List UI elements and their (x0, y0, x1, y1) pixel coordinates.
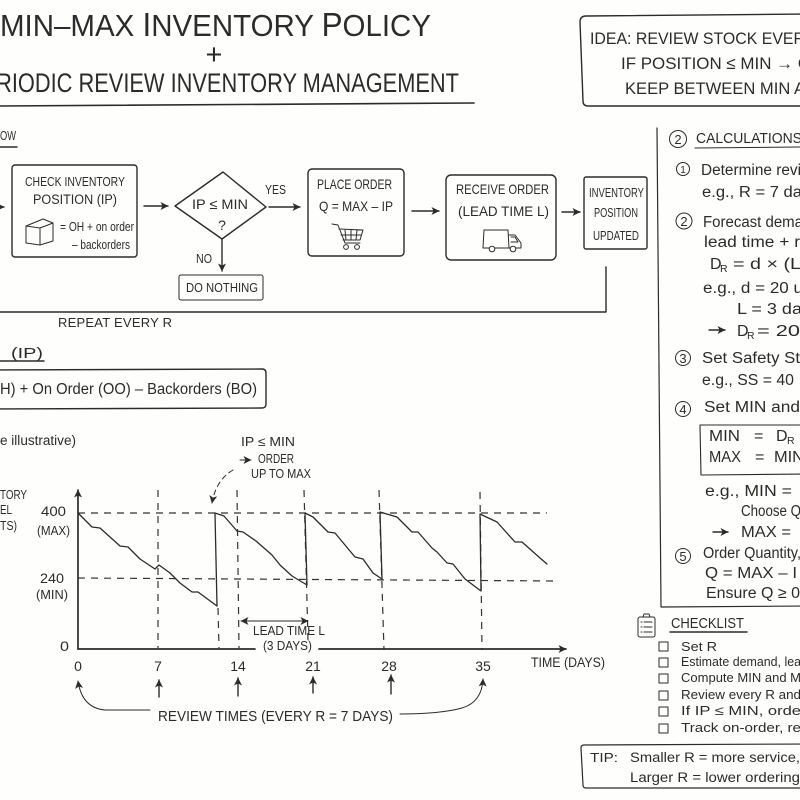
checklist items: Compute MIN and M (681, 670, 800, 685)
decision: IP at or below MIN (175, 172, 266, 239)
heading: checklist: CHECKLIST (671, 616, 744, 632)
box: receive order (446, 175, 556, 260)
formula box: min max: R (787, 435, 795, 447)
callout: tip: TIP: (590, 750, 618, 765)
box: place order (308, 169, 404, 256)
step 4: min and max: Set MIN and (704, 399, 800, 416)
step 4: min and max: MAX = (741, 524, 791, 541)
heading: workflow: OW (0, 128, 17, 143)
axis labels (0, 488, 605, 670)
x-axis tick labels: 35 (475, 658, 491, 674)
step 2: forecast demand: L = 3 da (737, 301, 800, 318)
x-axis tick labels: 7 (154, 658, 162, 674)
formula box: min max: D (776, 428, 788, 445)
step 2: forecast demand: R (720, 263, 728, 275)
decision: IP at or below MIN: IP ≤ MIN (192, 196, 248, 212)
callout: tip: Larger R = lower ordering (630, 770, 800, 785)
label: no: NO (196, 251, 212, 266)
axis labels: 0 (60, 638, 69, 654)
axis labels: (MAX) (37, 523, 70, 538)
x-axis tick labels: 21 (305, 658, 321, 674)
step 2: forecast demand: R (747, 330, 755, 342)
panel: calculations (657, 128, 800, 607)
step 5: order quantity (676, 545, 800, 602)
box: check inventory position: POSITION (IP) (33, 192, 117, 207)
box: check inventory position: – backorders (72, 237, 130, 252)
axes (78, 490, 566, 649)
box: inventory position updated: INVENTORY (589, 185, 644, 200)
checklist items: Set R (681, 639, 717, 654)
step 3: safety stock (676, 350, 800, 389)
lead time bracket (241, 621, 325, 653)
heading: workflow (0, 128, 17, 147)
step 4: min and max: e.g., MIN = (705, 483, 792, 500)
step 1: review period: e.g., R = 7 da (702, 184, 800, 201)
box: check inventory position: CHECK INVENTORY (25, 174, 125, 189)
checklist items: Review every R and (681, 687, 800, 702)
decision: IP at or below MIN: ? (218, 217, 226, 233)
axis labels: 400 (41, 503, 66, 519)
step 1: review period: 1 (680, 165, 686, 176)
callout: tip (581, 744, 800, 788)
box: place order: Q = MAX – IP (319, 198, 393, 214)
box: do nothing: DO NOTHING (186, 280, 258, 295)
box: receive order: RECEIVE ORDER (456, 181, 549, 197)
box: place order: PLACE ORDER (317, 176, 392, 192)
box: receive order: (LEAD TIME L) (458, 203, 549, 219)
step 3: safety stock: e.g., SS = 40 (702, 372, 794, 389)
formula box: inventory position (0, 369, 266, 409)
step 2: forecast demand: D (710, 256, 722, 273)
step 2: forecast demand: e.g., d = 20 u (703, 280, 800, 297)
review time arrows (78, 675, 483, 725)
step 2: forecast demand (676, 213, 800, 342)
box: inventory position updated: UPDATED (593, 228, 639, 243)
axis labels: TIME (DAYS) (531, 654, 605, 670)
axis labels: TS) (0, 519, 17, 533)
formula box: min max: MIN (709, 428, 740, 445)
x-axis tick labels: 14 (230, 658, 246, 674)
box: check inventory position (12, 165, 137, 257)
arrow: repeat loop (0, 267, 606, 312)
x-axis tick labels: 28 (381, 658, 397, 674)
lead time bracket: (3 DAYS) (263, 639, 312, 653)
review time arrows: REVIEW TIMES (EVERY R = 7 DAYS) (158, 708, 393, 725)
arrow: receive to updated (562, 211, 580, 213)
arrow: no (221, 239, 223, 271)
title: MIN–MAX INVENTORY POLICY (0, 6, 431, 43)
formula box: min max (700, 425, 800, 475)
step 3: safety stock: 3 (679, 351, 687, 366)
flowchart (0, 165, 647, 330)
note: illustrative: e illustrative) (0, 433, 76, 448)
checklist (638, 614, 800, 735)
inventory level line (78, 512, 547, 606)
checklist items: Track on-order, re (681, 720, 800, 735)
step 5: order quantity: Ensure Q ≥ 0 (706, 585, 800, 602)
formula box: min max: MAX (709, 449, 741, 466)
lead time bracket: LEAD TIME L (253, 624, 325, 638)
title (0, 6, 474, 106)
heading: inventory position (0, 345, 44, 362)
heading: calculations: 2 (674, 132, 682, 147)
box: inventory position updated (584, 177, 647, 249)
formula box: min max: = (754, 428, 763, 445)
x-axis tick labels (74, 658, 491, 674)
callout: core idea (580, 14, 800, 106)
step 5: order quantity: Q = MAX – I (705, 565, 797, 582)
icon: cube (26, 219, 53, 245)
arrow: into check inventory (0, 206, 4, 208)
step 5: order quantity: 5 (679, 549, 687, 564)
formula box: inventory position: H) + On Order (OO) – Backorders (BO) (0, 381, 257, 398)
arrow: order to receive (412, 210, 439, 212)
callout: tip: Smaller R = more service, (630, 750, 800, 765)
step 2: forecast demand: = d × (L (733, 256, 800, 273)
step 3: safety stock: Set Safety St (702, 350, 800, 367)
step 4: min and max: 4 (679, 402, 687, 417)
dashed reference lines (78, 490, 557, 650)
icon: truck (483, 230, 521, 248)
formula box: min max: = (755, 449, 764, 466)
axis labels: EL (0, 503, 12, 517)
callout: order up to max: IP ≤ MIN (241, 434, 295, 449)
x-axis tick labels: 0 (74, 658, 82, 674)
step 4: min and max (676, 399, 800, 541)
callout: order up to max: UP TO MAX (251, 466, 311, 481)
box: inventory position updated: POSITION (594, 205, 638, 220)
axis labels: (MIN) (36, 587, 68, 602)
step 1: review period: Determine revi (701, 162, 800, 179)
step 2: forecast demand: 2 (680, 214, 688, 229)
step 2: forecast demand: lead time + r (704, 234, 800, 251)
heading: inventory position: (IP) (11, 345, 43, 362)
icon: clipboard (638, 614, 655, 637)
label: yes: YES (265, 182, 286, 197)
box: do nothing (179, 275, 263, 300)
step 2: forecast demand: = 20 (757, 323, 800, 340)
chart: sawtooth inventory level (0, 434, 605, 725)
arrow: check to decision (144, 205, 168, 207)
callout: order up to max: ORDER (258, 451, 294, 466)
title: + (206, 39, 222, 71)
axis labels: 240 (40, 570, 64, 586)
callout: order up to max (212, 434, 311, 503)
axis labels: TORY (0, 488, 28, 502)
box: check inventory position: = OH + on order (60, 219, 135, 234)
step 2: forecast demand: D (737, 323, 749, 340)
step 1: review period (676, 162, 800, 201)
arrow: yes (269, 206, 300, 208)
label: repeat every R: REPEAT EVERY R (58, 315, 172, 330)
icon: shopping cart (332, 224, 363, 243)
checklist items: If IP ≤ MIN, orde (681, 703, 800, 718)
checklist items (659, 639, 800, 735)
